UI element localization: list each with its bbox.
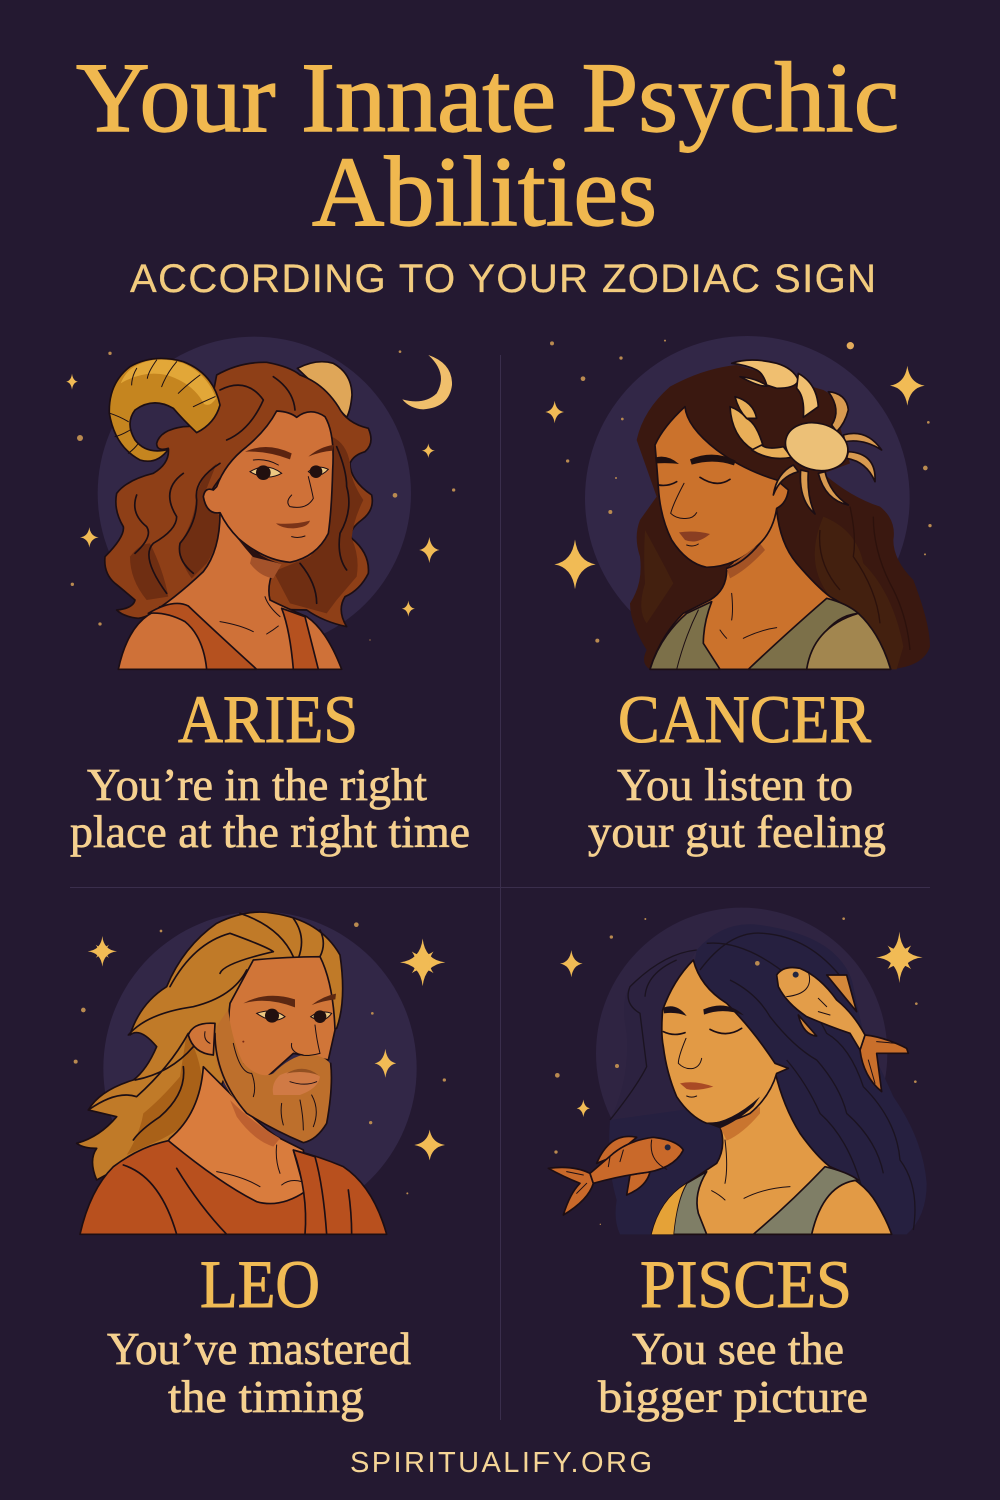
subtitle: ACCORDING TO YOUR ZODIAC SIGN xyxy=(130,257,876,301)
facial features xyxy=(663,1005,790,1200)
text: leo ability xyxy=(107,1323,411,1422)
text: aries ability xyxy=(70,759,470,857)
shoulders and neck xyxy=(652,1072,892,1234)
panel: pisces xyxy=(548,908,927,1422)
illustration: leo man with long mane xyxy=(74,912,446,1234)
horn xyxy=(109,358,220,461)
title: Your Innate Psychic xyxy=(76,42,899,153)
text: aries ability: place at the right time xyxy=(70,806,470,857)
text: aries ability: You’re in the right xyxy=(87,759,427,810)
title: Abilities xyxy=(312,136,657,247)
stars and dots xyxy=(545,340,932,643)
text: cancer ability: your gut feeling xyxy=(588,806,886,857)
stars and dots xyxy=(66,350,455,641)
icon: lower fish xyxy=(548,1136,683,1215)
text: pisces ability: bigger picture xyxy=(598,1371,868,1422)
hair xyxy=(609,924,927,1234)
face xyxy=(655,407,788,567)
icon: crescent moon xyxy=(402,355,452,409)
heading: aries: ARIES xyxy=(178,681,358,757)
text: pisces ability: You see the xyxy=(632,1323,844,1374)
top xyxy=(650,598,891,669)
illustration: cancer woman with crab xyxy=(545,336,932,669)
top xyxy=(652,1167,858,1234)
title xyxy=(76,42,899,247)
illustration: pisces woman with fish xyxy=(548,908,927,1234)
shoulders and neck xyxy=(650,510,891,669)
panel: cancer xyxy=(545,336,932,857)
shoulders and neck xyxy=(160,1067,308,1208)
shoulders and neck xyxy=(118,513,342,669)
ear xyxy=(188,1023,215,1055)
face xyxy=(229,957,335,1083)
hair xyxy=(105,362,372,627)
text: cancer ability xyxy=(588,759,886,857)
stars and dots xyxy=(554,917,923,1225)
illustration: aries woman with ram horns xyxy=(66,337,455,669)
face xyxy=(662,960,788,1123)
facial features xyxy=(220,445,333,634)
beard xyxy=(215,1010,331,1143)
text: leo ability: the timing xyxy=(168,1371,364,1422)
beard outline xyxy=(215,1033,331,1143)
shirt xyxy=(80,1141,387,1234)
back horn xyxy=(297,362,352,417)
face xyxy=(203,411,333,562)
icon: crab xyxy=(730,360,882,514)
icon: upper fish xyxy=(777,967,908,1092)
text: leo ability: You’ve mastered xyxy=(107,1323,411,1374)
panel: leo xyxy=(74,912,446,1422)
text: pisces ability xyxy=(598,1323,868,1422)
heading: pisces: PISCES xyxy=(640,1246,852,1322)
facial features xyxy=(205,994,336,1187)
heading: leo: LEO xyxy=(200,1246,320,1322)
facial features xyxy=(655,455,777,638)
hair xyxy=(77,912,343,1180)
stars and dots xyxy=(74,922,446,1194)
footer: website: SPIRITUALIFY.ORG xyxy=(350,1447,652,1479)
text: cancer ability: You listen to xyxy=(617,759,853,810)
panel: aries xyxy=(66,337,470,857)
heading: cancer: CANCER xyxy=(618,681,872,757)
top xyxy=(148,603,318,669)
hair xyxy=(630,365,930,669)
